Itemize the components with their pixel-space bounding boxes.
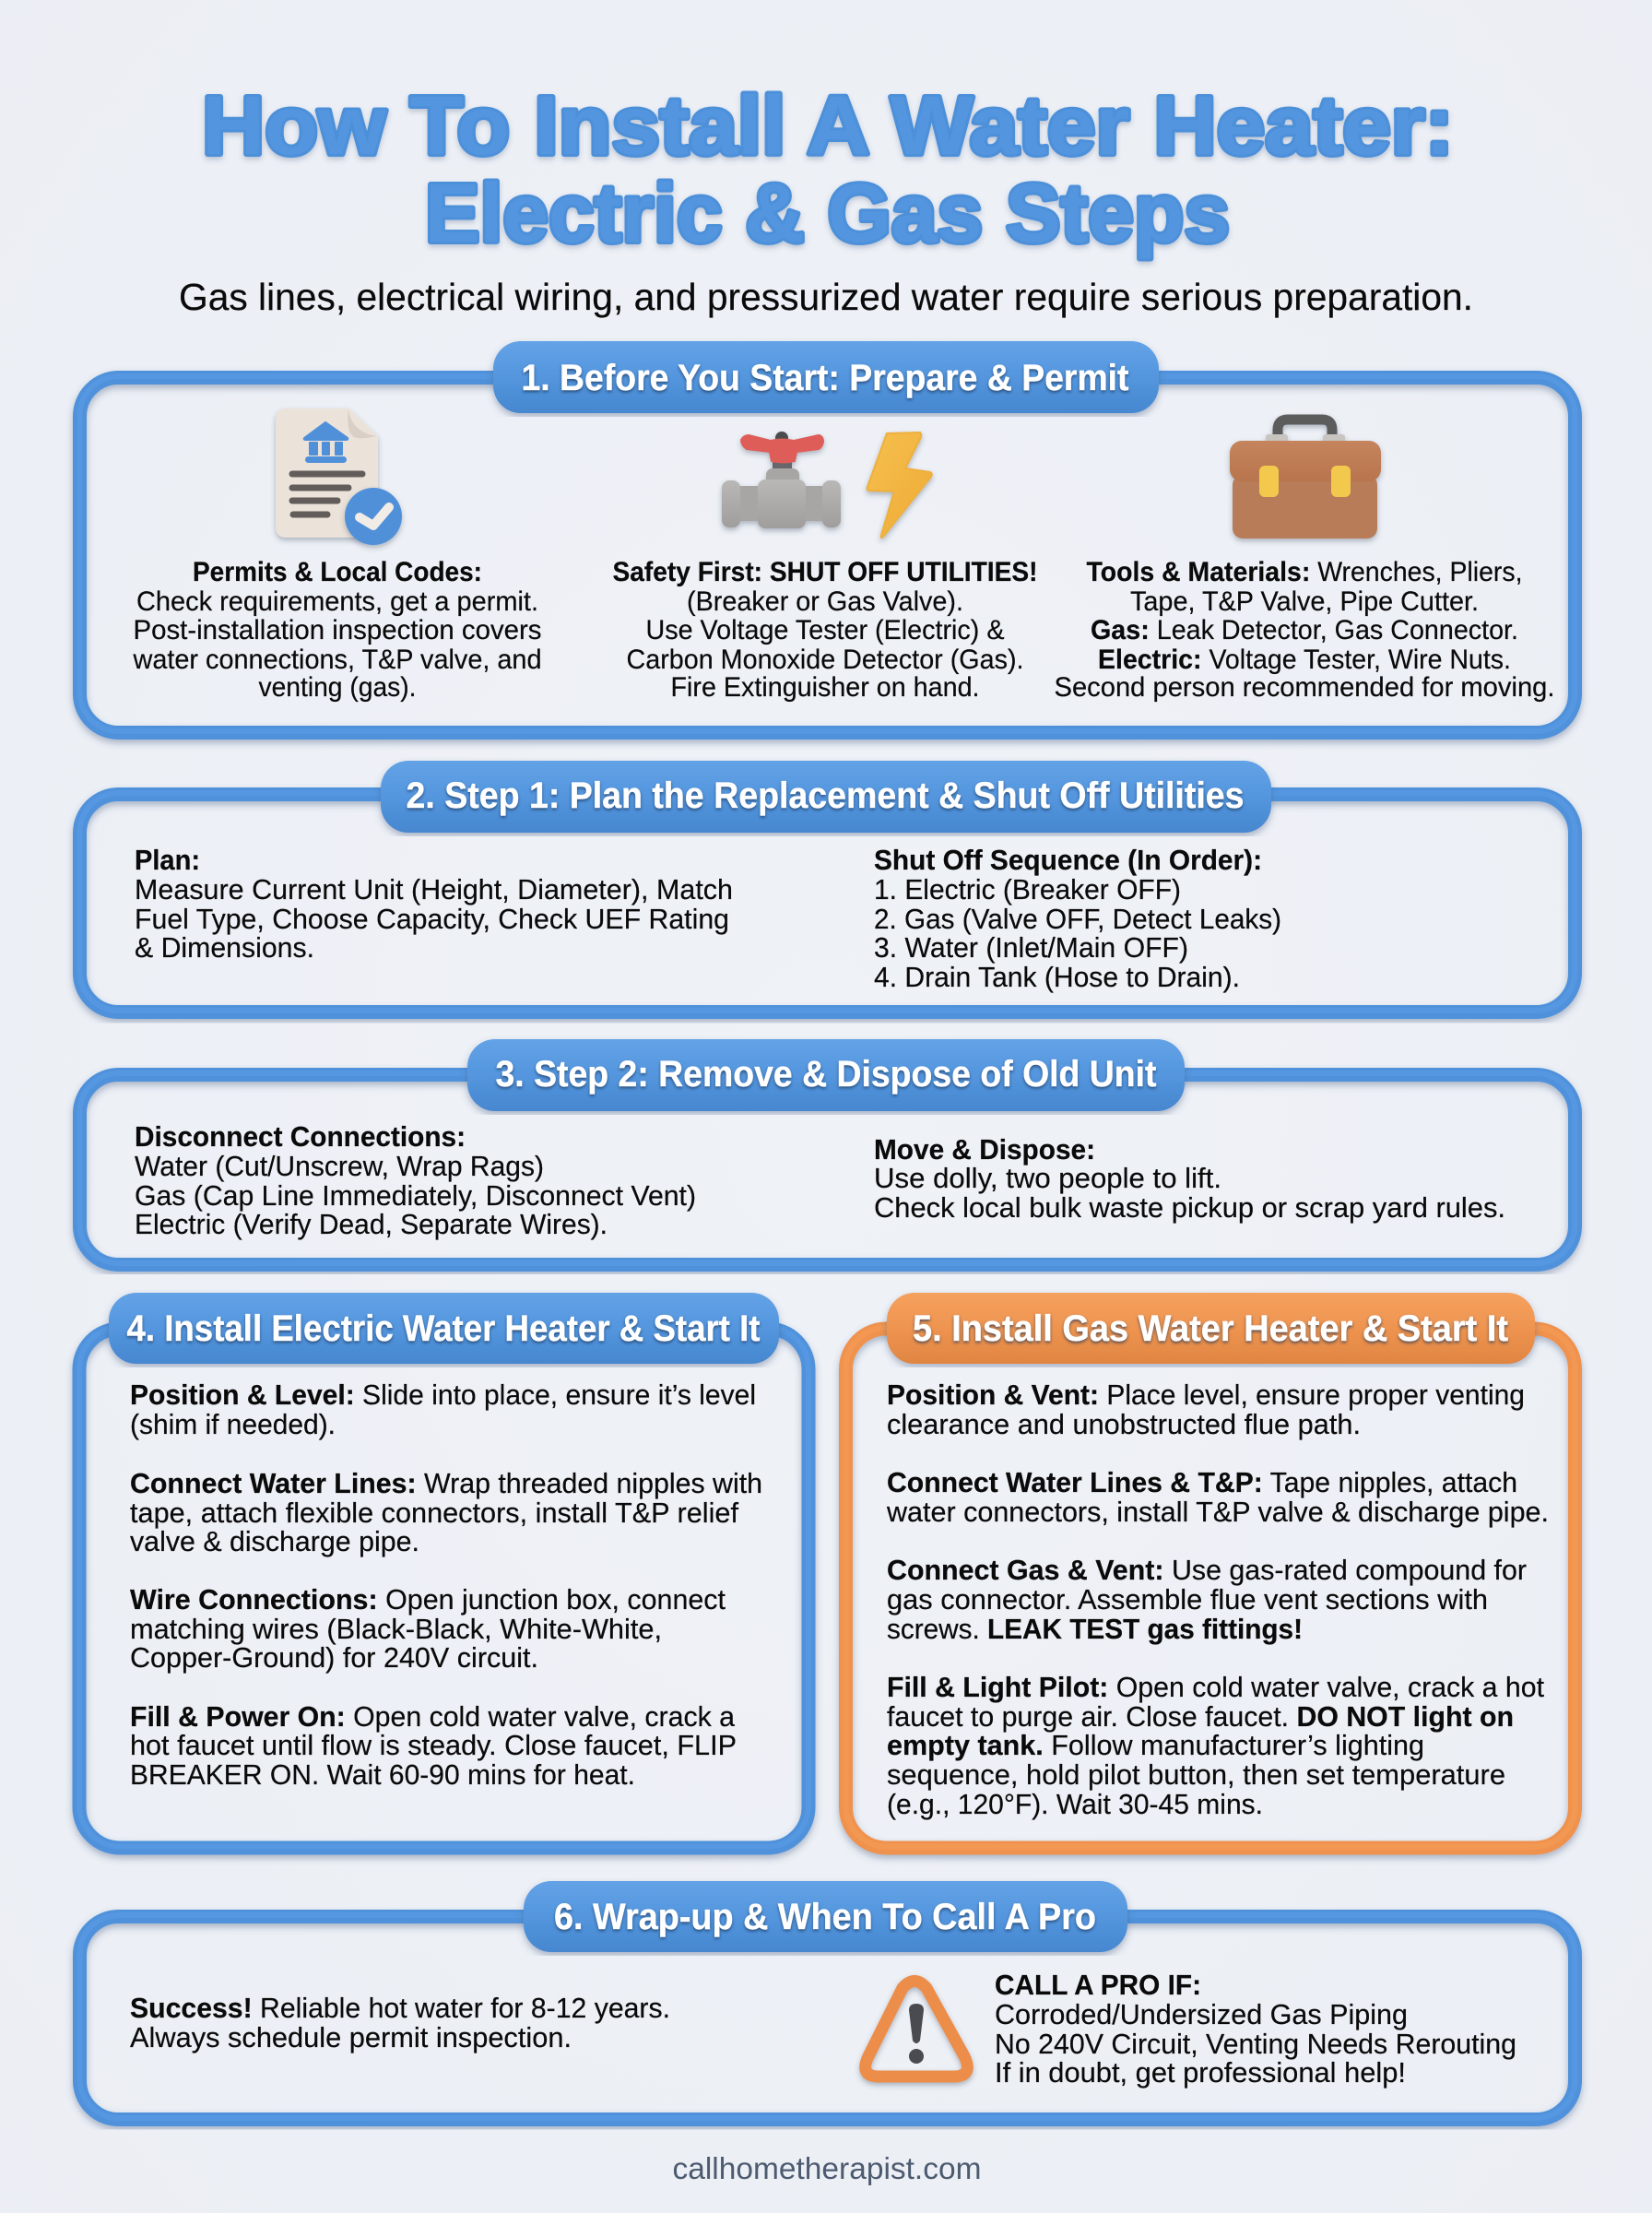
panel frame [79,795,1575,1012]
text: connect water lines and T&P [886,1466,1549,1528]
text: safety first: Safety First: SHUT OFF UTILITIES! [612,557,1038,587]
text: permits: Check requirements, get a permit. [136,586,538,617]
text: tools and materials: Tools & Materials: Wrenches, Pliers, [1086,557,1523,587]
text: disconnect connections: Electric (Verify Dead, Separate Wires). [135,1208,608,1240]
text: fill and light pilot: sequence, hold pilot button, then set temperature [887,1758,1505,1791]
text: fill and power on: Fill & Power On: Open cold water valve, crack a [130,1700,736,1733]
text: connect water lines: Connect Water Lines: Wrap threaded nipples with [130,1467,762,1499]
text: connect water lines: valve & discharge pipe. [130,1525,419,1557]
heading pill: 1. Before You Start: Prepare & Permit [522,358,1128,398]
text: connect gas and vent: screws. LEAK TEST gas fittings! [887,1613,1303,1645]
text: position and vent: clearance and unobstructed flue path. [887,1408,1361,1440]
text: fill and light pilot: faucet to purge air. Close faucet. DO NOT light on [887,1700,1514,1733]
text: position and vent: Position & Vent: Place level, ensure proper venting [887,1379,1525,1411]
text: disconnect connections: Water (Cut/Unscrew, Wrap Rags) [135,1150,544,1182]
panel: 4 electric water heater [79,1293,808,1848]
text: plan: Measure Current Unit (Height, Diameter), Match [135,873,733,905]
text: call a pro: Corroded/Undersized Gas Piping [995,1998,1408,2030]
text: move and dispose: Check local bulk waste pickup or scrap yard rules. [874,1191,1505,1224]
icon: gas valve [722,432,841,528]
text: permits: Post-installation inspection covers [133,615,542,645]
panel frame [79,378,1575,732]
text: shut off sequence: 1. Electric (Breaker OFF) [874,873,1181,905]
text: success [130,1992,670,2053]
text: position and level: Position & Level: Slide into place, ensure it’s level [130,1379,756,1411]
text: disconnect connections [135,1120,696,1240]
text: safety first: Use Voltage Tester (Electric) & [645,615,1005,645]
text: safety first: Carbon Monoxide Detector (Gas). [627,645,1023,675]
text: connect water lines and T&P: Connect Water Lines & T&P: Tape nipples, attach [887,1466,1517,1498]
text: plan: Plan: [135,844,200,876]
text: position and level: (shim if needed). [130,1408,336,1440]
heading pill: 2. Step 1: Plan the Replacement & Shut Off Utilities [406,775,1245,816]
text: tools and materials: Gas: Leak Detector, Gas Connector. [1091,615,1518,645]
heading pill [493,341,1159,413]
text: success: Always schedule permit inspection. [130,2021,572,2053]
text: call a pro [995,1969,1516,2089]
panel frame [846,1329,1575,1848]
panel: 2 plan the replacement [79,761,1575,1012]
heading pill [524,1881,1127,1952]
panel frame [79,1075,1575,1265]
text: shut off sequence: Shut Off Sequence (In Order): [874,844,1262,876]
text: shut off sequence: 3. Water (Inlet/Main OFF) [874,931,1188,964]
title: How To Install A Water Heater: [202,80,1454,172]
text: fill and power on: hot faucet until flow is steady. Close faucet, FLIP [130,1729,737,1761]
text: call a pro: If in doubt, get professional help! [995,2056,1406,2089]
text: call a pro: CALL A PRO IF: [995,1969,1201,2001]
text: shut off sequence [874,844,1281,993]
text: wire connections: Wire Connections: Open junction box, connect [130,1583,726,1615]
text: connect water lines and T&P: water connectors, install T&P valve & discharge pipe. [886,1496,1549,1528]
text: disconnect connections: Gas (Cap Line Immediately, Disconnect Vent) [135,1179,696,1212]
heading pill: 5. Install Gas Water Heater & Start It [913,1308,1508,1349]
text: safety first [612,557,1038,703]
text: tools and materials [1055,557,1554,703]
icon: permit document [276,408,402,545]
panel: 1 before you start [79,341,1575,732]
text: move and dispose [874,1133,1505,1224]
title [202,80,1454,260]
text: move and dispose: Move & Dispose: [874,1133,1095,1166]
text: fill and light pilot [887,1671,1544,1820]
text: permits [133,557,541,703]
text: shut off sequence: 4. Drain Tank (Hose to Drain). [874,961,1240,993]
text: move and dispose: Use dolly, two people to lift. [874,1162,1221,1194]
text: connect water lines [130,1467,762,1557]
text: tools and materials: Tape, T&P Valve, Pipe Cutter. [1130,586,1479,617]
text: connect gas and vent: Connect Gas & Vent: Use gas-rated compound for [887,1554,1527,1586]
text: fill and power on: BREAKER ON. Wait 60-90 mins for heat. [130,1758,635,1791]
icon: toolbox [1230,420,1381,538]
text: safety first: Fire Extinguisher on hand. [671,672,979,703]
icon: lightning bolt [867,432,932,538]
text: plan: Fuel Type, Choose Capacity, Check UEF Rating [135,903,729,935]
text: disconnect connections: Disconnect Connections: [135,1120,466,1153]
footer: callhometherapist.com [673,2151,981,2185]
text: fill and power on [130,1700,737,1791]
text: fill and light pilot: Fill & Light Pilot: Open cold water valve, crack a hot [887,1671,1544,1703]
text: shut off sequence: 2. Gas (Valve OFF, Detect Leaks) [874,903,1281,935]
panel frame [79,1916,1575,2119]
text: plan [135,844,733,964]
heading pill [381,761,1271,833]
heading pill: 6. Wrap-up & When To Call A Pro [554,1897,1096,1937]
text: permits: venting (gas). [258,672,417,703]
panel: 6 wrap-up [79,1881,1575,2119]
text: wire connections: matching wires (Black-Black, White-White, [130,1613,662,1645]
text: fill and light pilot: empty tank. Follow manufacturer’s lighting [887,1729,1424,1761]
text: safety first: (Breaker or Gas Valve). [687,586,963,617]
text: position and vent [887,1379,1525,1440]
title: Electric & Gas Steps [425,168,1230,260]
heading pill [887,1293,1535,1364]
text: tools and materials: Second person recommended for moving. [1055,672,1554,703]
heading pill: 4. Install Electric Water Heater & Start It [127,1308,760,1349]
text: tools and materials: Electric: Voltage Tester, Wire Nuts. [1098,645,1511,675]
text: permits: water connections, T&P valve, and [133,645,541,675]
icon: warning triangle [866,1981,967,2077]
text: connect water lines: tape, attach flexible connectors, install T&P relief [130,1497,738,1529]
heading pill: 3. Step 2: Remove & Dispose of Old Unit [496,1054,1156,1095]
heading pill [467,1039,1185,1111]
panel: 5 gas water heater [846,1293,1575,1848]
text: success: Success! Reliable hot water for 8-12 years. [130,1992,670,2024]
text: wire connections: Copper-Ground) for 240V circuit. [130,1641,538,1674]
text: fill and light pilot: (e.g., 120°F). Wait 30-45 mins. [887,1788,1263,1820]
panel: 3 remove old unit [79,1039,1575,1265]
heading pill [109,1293,779,1364]
text: connect gas and vent [887,1554,1527,1645]
panel frame [79,1329,808,1848]
text: position and level [130,1379,756,1440]
text: call a pro: No 240V Circuit, Venting Needs Rerouting [995,2028,1516,2060]
text: connect gas and vent: gas connector. Assemble flue vent sections with [887,1583,1488,1615]
subtitle: Gas lines, electrical wiring, and pressurized water require serious preparation. [179,276,1473,318]
text: wire connections [130,1583,726,1674]
text: plan: & Dimensions. [135,931,314,964]
text: permits: Permits & Local Codes: [193,557,482,587]
